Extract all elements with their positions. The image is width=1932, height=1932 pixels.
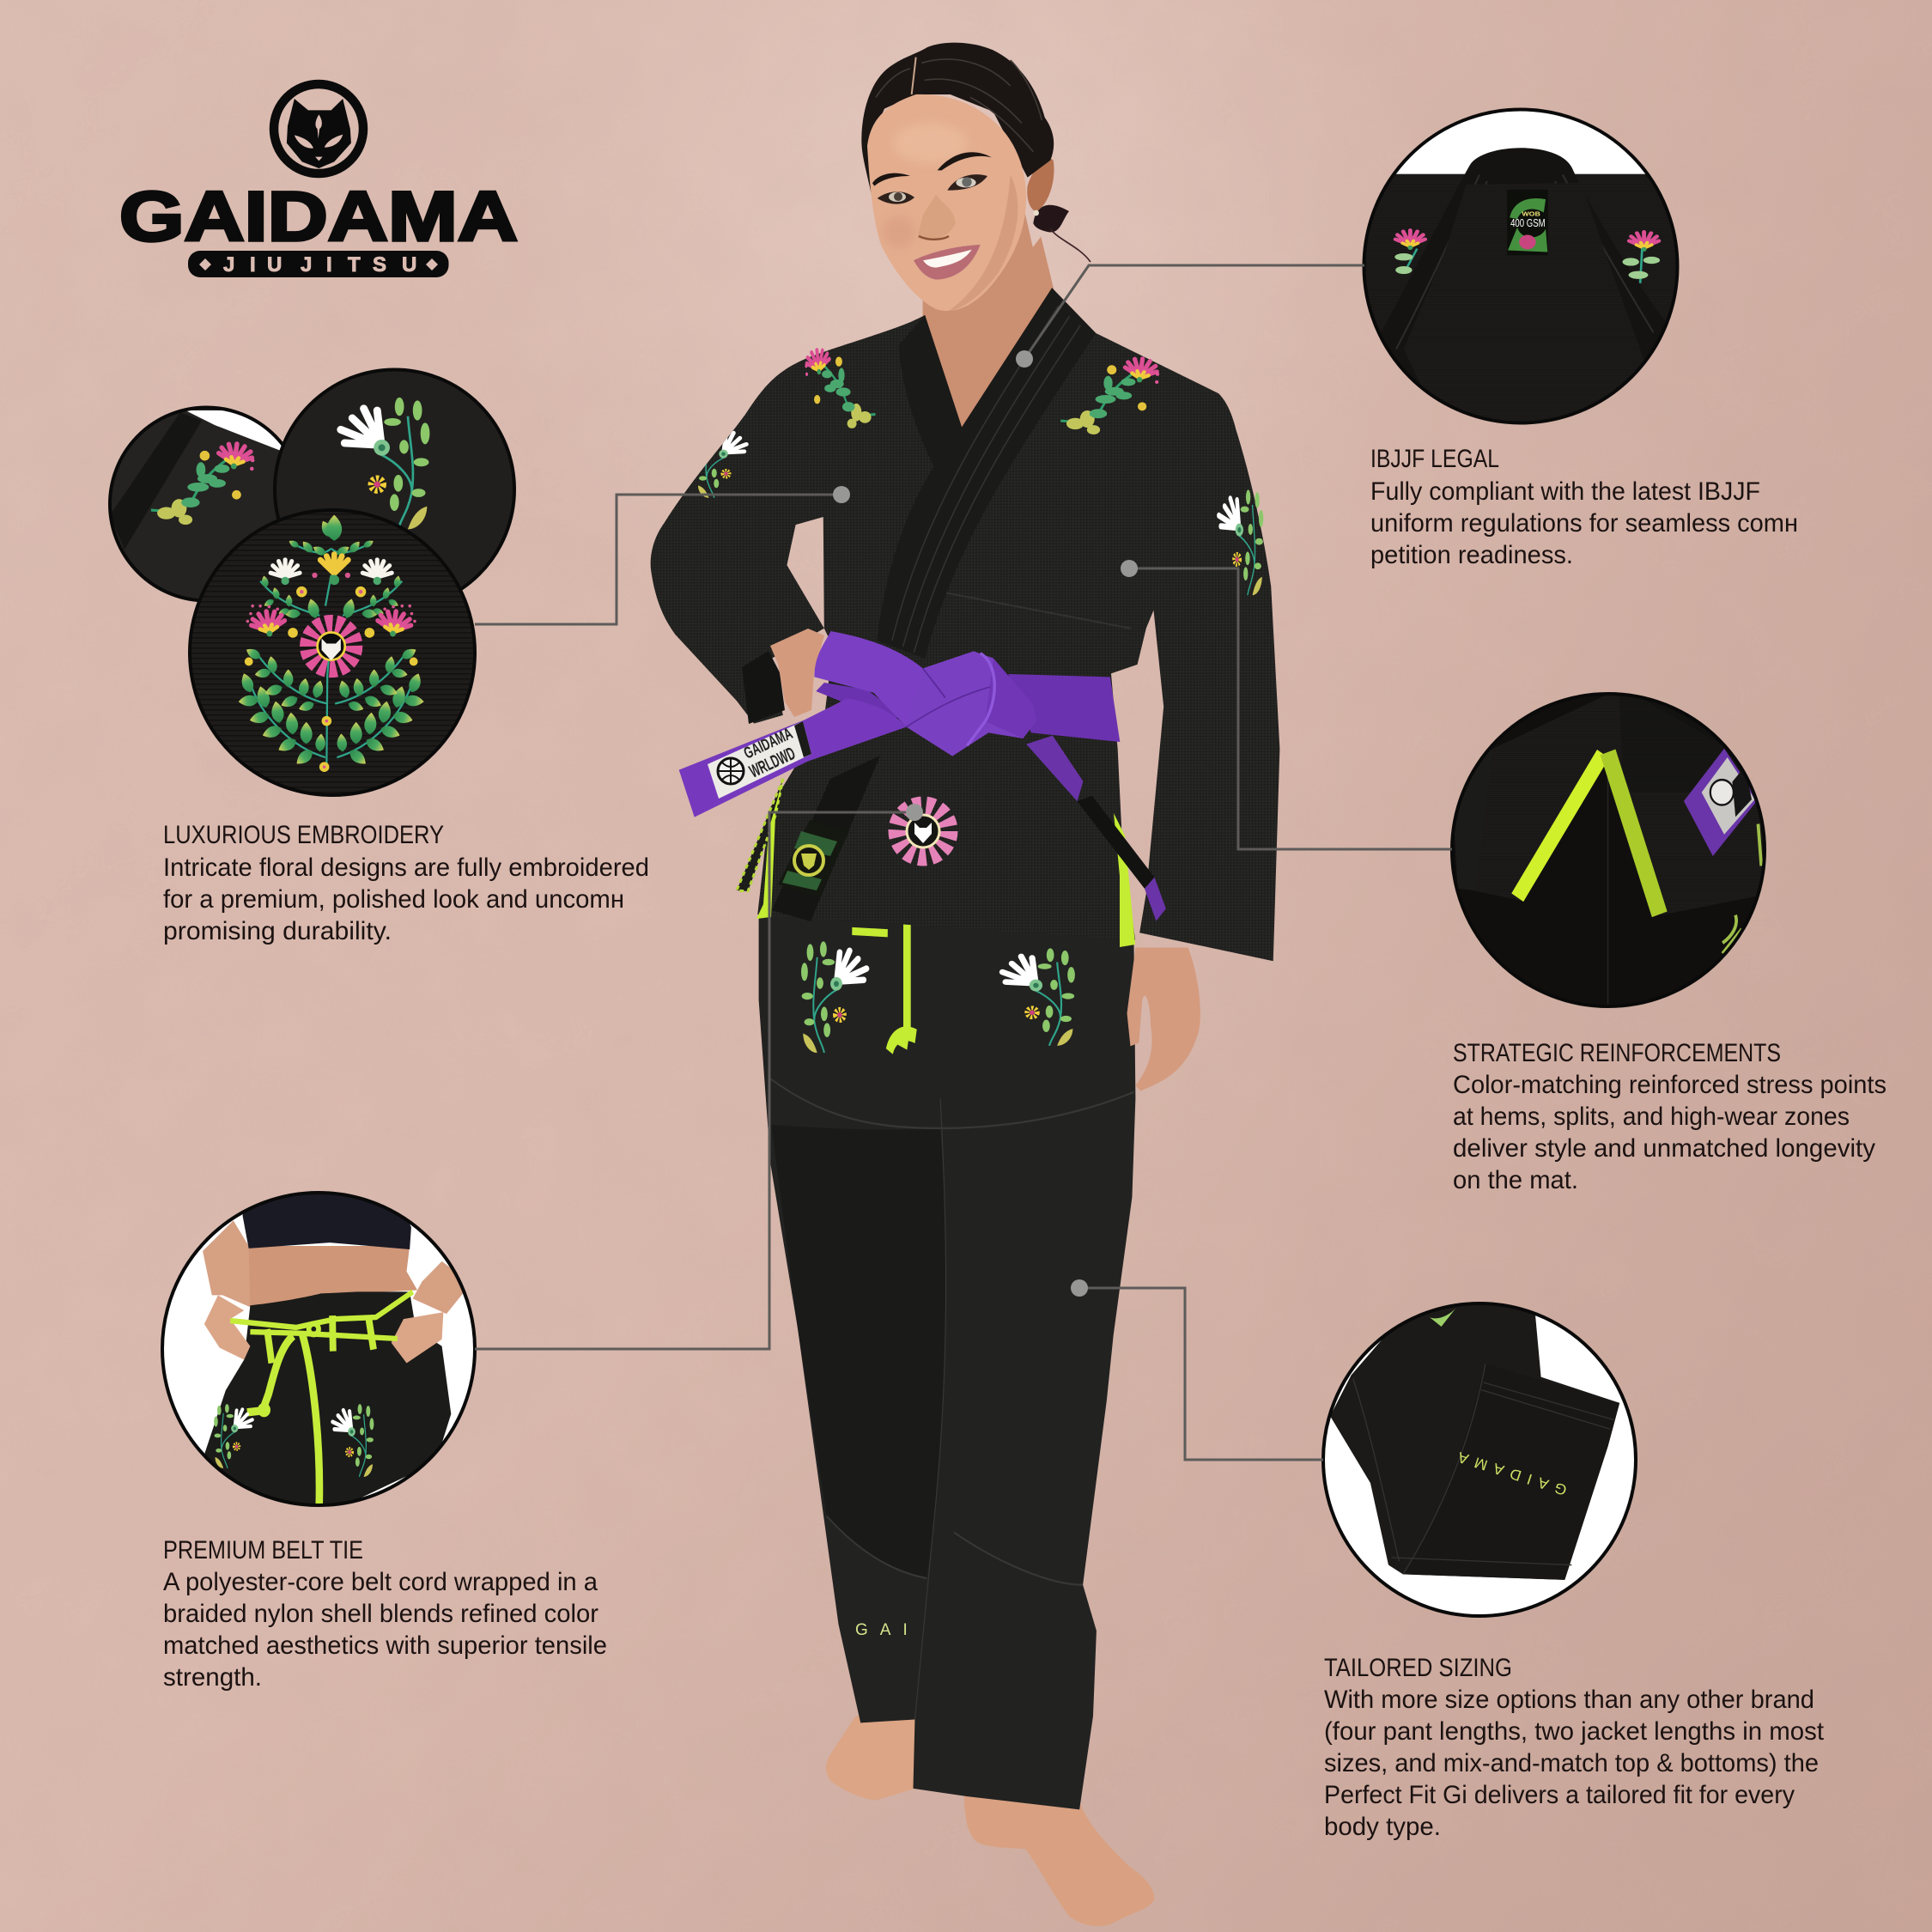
logo: Gaidama Jiu Jitsu	[119, 84, 518, 277]
jacket	[651, 288, 1279, 961]
text block: IBJJF legal: Fully compliant with the latest IBJJF	[1370, 477, 1760, 506]
smile	[914, 245, 981, 280]
text block: premium belt tie: strength.	[163, 1663, 262, 1692]
text block: premium belt tie: matched aesthetics with superior tensile	[163, 1631, 607, 1660]
sleeve cuff interior	[742, 651, 785, 724]
embroidery: jacket flower	[898, 806, 948, 856]
text block: tailored sizing: With more size options than any other brand	[1324, 1686, 1814, 1714]
left vent: stitched strip and neon	[737, 779, 783, 919]
text: GAIDAMA hem mark: GAIDAMA	[1448, 1446, 1569, 1499]
left half of motif	[238, 519, 336, 768]
text block: tailored sizing: TAILORED SIZING	[1324, 1654, 1512, 1682]
hair	[861, 43, 1054, 195]
inset: sleeve embroidery	[275, 369, 515, 610]
text block: IBJJF legal: IBJJF LEGAL	[1370, 445, 1499, 473]
collar	[1376, 148, 1668, 415]
hand at waist	[770, 629, 824, 717]
pill: Jiu Jitsu	[188, 251, 448, 277]
ear	[1027, 159, 1054, 212]
inset: strategic reinforcements	[1451, 687, 1768, 1008]
pants	[759, 914, 1135, 1809]
pants	[204, 1291, 451, 1512]
embroidery: pants	[801, 941, 1075, 1053]
right lapel	[877, 288, 1096, 659]
black top	[242, 1192, 411, 1249]
text block: IBJJF legal: uniform regulations for seamless comн	[1370, 509, 1798, 538]
tag: 400 GSM	[1510, 216, 1546, 229]
neon drawcord	[852, 921, 916, 1051]
nose	[917, 195, 956, 240]
right vent neon	[1114, 813, 1135, 947]
text block: luxurious embroidery	[163, 821, 649, 945]
text block: premium belt tie: A polyester-core belt cord wrapped in a	[163, 1568, 598, 1596]
left leg shade	[771, 1125, 946, 1578]
inset: IBJJF collar	[1362, 108, 1680, 424]
central pink flower	[310, 625, 353, 668]
neon V reinforcement	[1517, 754, 1603, 897]
top leaf and stems	[325, 575, 331, 767]
eyebrows	[872, 152, 992, 186]
belt band	[1008, 674, 1120, 742]
text block: strategic reinforcements: at hems, splits, and high-wear zones	[1453, 1103, 1850, 1131]
text block: IBJJF legal: petition readiness.	[1370, 541, 1573, 569]
neck and chest	[923, 237, 1054, 428]
upper strand	[814, 631, 945, 727]
top yellow flower	[320, 554, 348, 574]
panel: luxurious embroidery insets	[110, 369, 515, 797]
text block: strategic reinforcements: Color-matching reinforced stress points	[1453, 1071, 1886, 1099]
callout: belt tie leader	[475, 804, 923, 1349]
neon cord	[230, 1291, 413, 1504]
collar flowers	[1395, 230, 1425, 250]
hands	[204, 1295, 250, 1360]
right half of motif	[327, 519, 424, 768]
belt tag	[1684, 749, 1758, 856]
right tail	[1026, 736, 1083, 801]
inset: premium belt tie	[161, 1192, 476, 1512]
text block: premium belt tie: PREMIUM BELT TIE	[163, 1536, 363, 1564]
wordmark: GAIDAMA	[119, 178, 518, 256]
left lapel	[899, 315, 963, 483]
inner panel	[1404, 183, 1646, 422]
belt label: GAIDAMA	[741, 725, 796, 763]
knot	[907, 651, 1036, 756]
left tail	[679, 698, 907, 817]
embroidery fragments	[1722, 824, 1761, 953]
bun and wisp	[1033, 205, 1069, 232]
embroidery: shoulders and sleeves	[696, 348, 1263, 595]
text block: premium belt tie: braided nylon shell blends refined color	[163, 1600, 598, 1628]
callout: reinforcements leader	[1121, 560, 1452, 849]
icon: fox head emblem	[274, 84, 363, 173]
text block: strategic reinforcements: deliver style and unmatched longevity	[1453, 1134, 1875, 1163]
text block: tailored sizing: Perfect Fit Gi delivers a tailored fit for every	[1324, 1781, 1795, 1809]
arms and torso	[203, 1220, 257, 1307]
tag	[1507, 190, 1548, 255]
embroidery	[332, 1404, 374, 1477]
lower strand	[816, 683, 909, 721]
figure: woman wearing black gi with purple belt	[651, 43, 1279, 1926]
inset: floral medallion	[189, 510, 476, 797]
callout: tailored sizing leader	[1071, 1279, 1323, 1460]
lower lapel	[772, 756, 880, 921]
text block: premium belt tie	[163, 1536, 607, 1692]
text block: IBJJF legal	[1370, 445, 1798, 569]
face	[867, 94, 1026, 311]
text block: tailored sizing	[1324, 1654, 1825, 1841]
text block: tailored sizing: (four pant lengths, two jacket lengths in most	[1324, 1717, 1825, 1746]
pill: Jiu Jitsu: JIU JITSU	[223, 253, 416, 276]
purple belt	[679, 631, 1166, 921]
eyes	[878, 174, 987, 204]
text block: luxurious embroidery: for a premium, polished look and uncomн	[163, 885, 624, 914]
jacket panel	[1473, 687, 1768, 915]
belt label: WRLDWD	[746, 744, 799, 782]
left foot and right foot	[826, 1706, 1154, 1926]
inset: shoulder embroidery	[110, 407, 304, 601]
text block: strategic reinforcements	[1453, 1039, 1886, 1194]
tag: WOB	[1522, 210, 1540, 217]
text block: luxurious embroidery: Intricate floral designs are fully embroidered	[163, 854, 649, 882]
hand on thigh	[1127, 948, 1200, 1091]
head	[861, 43, 1091, 320]
neck	[925, 212, 1056, 320]
text: GAI on pant leg: GAI	[855, 1621, 920, 1639]
text block: luxurious embroidery: promising durability.	[163, 917, 392, 945]
callout: IBJJF leader	[1016, 265, 1364, 368]
bottom flowers	[322, 716, 331, 726]
inset: tailored sizing	[1322, 1293, 1637, 1616]
folded pant	[1330, 1293, 1619, 1580]
belt label	[708, 721, 811, 799]
text block: luxurious embroidery: LUXURIOUS EMBROIDERY	[163, 821, 444, 849]
callout: embroidery leader	[475, 486, 850, 624]
text block: strategic reinforcements: on the mat.	[1453, 1166, 1578, 1194]
text block: strategic reinforcements: STRATEGIC REINFORCEMENTS	[1453, 1039, 1781, 1067]
text block: tailored sizing: sizes, and mix-and-match top & bottoms) the	[1324, 1749, 1819, 1777]
text block: tailored sizing: body type.	[1324, 1813, 1441, 1841]
hem tag	[778, 820, 849, 897]
